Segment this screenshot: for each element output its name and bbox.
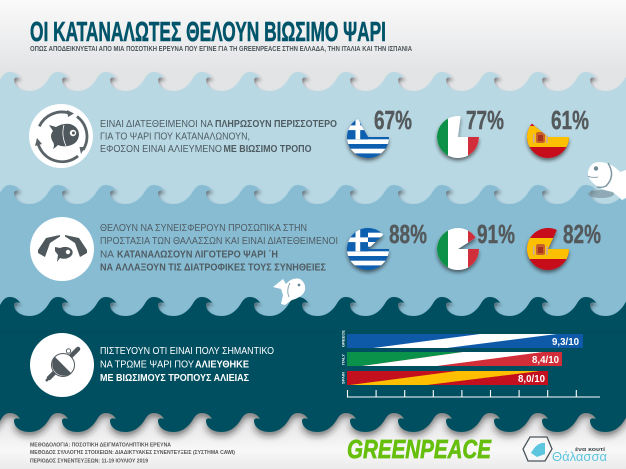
logo: ena kouti thalassa: ένα κουτί [575,447,606,453]
title: ΟΙ ΚΑΤΑΝΑΛΩΤΕΣ ΘΕΛΟΥΝ ΒΙΩΣΙΜΟ ΨΑΡΙ [30,16,386,47]
text: methodology: ΠΕΡΙΟΔΟΣ ΣΥΝΕΝΤΕΥΞΕΩΝ: 11-19 ΙΟΥΛΙΟΥ 2019 [30,458,148,464]
text: methodology [30,442,235,464]
text: willing to pay more: ΜΕ ΒΙΩΣΙΜΟ ΤΡΟΠΟ [224,143,312,155]
text: contribute personally [100,222,338,274]
bar: Greece 9,3/10 [340,330,583,348]
value: Italy 77%: 77% [466,105,504,135]
text: contribute personally: ΘΕΛΟΥΝ ΝΑ ΣΥΝΕΙΣΦΕΡΟΥΝ ΠΡΟΣΩΠΙΚΑ ΣΤΗΝ [100,222,307,234]
text: important to eat sustainably caught fish [100,345,274,384]
text: important to eat sustainably caught fish: ΜΕ ΒΙΩΣΙΜΟΥΣ ΤΡΟΠΟΥΣ ΑΛΙΕΙΑΣ [100,372,249,384]
bar: Italy 8,4/10: ITALY [340,354,346,365]
logo: Greenpeace: GREENPEACE [347,434,492,464]
panel: pay more band [0,72,626,212]
bar: Greece 9,3/10: GREECE [340,330,346,347]
axis with ticks [348,390,600,397]
text: contribute personally: ΝΑ [100,248,114,260]
text: willing to pay more [100,118,337,155]
icon: fishing float [30,333,94,397]
pie: Spain 82% [527,228,569,270]
value: Spain 61%: 61% [551,105,589,135]
icon: white fish right edge [588,162,626,200]
text: willing to pay more: ΕΦΟΣΟΝ ΕΙΝΑΙ ΑΛΙΕΥΜΕΝΟ [100,143,222,155]
panel: sustainable fishing band bottom edge [0,333,626,432]
bar: Spain 8,0/10: SPAIN [340,372,346,384]
text: willing to pay more: ΠΛΗΡΩΣΟΥΝ ΠΕΡΙΣΣΟΤΕΡΟ [215,118,337,130]
text: important to eat sustainably caught fish: ΝΑ ΤΡΩΜΕ ΨΑΡΙ ΠΟΥ [100,358,194,370]
pie: Spain 61% [527,116,569,158]
panel: sustainable fishing band [0,297,626,333]
text: methodology: ΜΕΘΟΔΟΣ ΣΥΛΛΟΓΗΣ ΣΤΟΙΧΕΙΩΝ: ΔΙΑΔΙΚΤΥΑΚΕΣ ΣΥΝΕΝΤΕΥΞΕΙΣ (ΣΥΣΤΗΜΑ CAWI) [30,450,235,456]
pie: Greece 67% [347,116,389,158]
text: important to eat sustainably caught fish: ΑΛΙΕΥΘΗΚΕ [195,358,249,370]
bar chart: scores by country [340,330,600,397]
text: contribute personally: ΝΑ ΑΛΛΑΞΟΥΝ ΤΙΣ ΔΙΑΤΡΟΦΙΚΕΣ ΤΟΥΣ ΣΥΝΗΘΕΙΕΣ [100,262,326,274]
icon: fish with recycling arrows [29,104,93,168]
panel: contribute band [0,185,626,325]
value: Greece 67%: 67% [374,105,412,135]
icon: small white fish on wave [273,279,305,305]
text: willing to pay more: ΓΙΑ ΤΟ ΨΑΡΙ ΠΟΥ ΚΑΤΑΝΑΛΩΝΟΥΝ, [100,130,250,142]
bar: Spain 8,0/10: 8,0/10 [518,373,545,385]
pie: Italy 91% [437,228,479,270]
bar: Italy 8,4/10 [340,352,562,366]
bar: Spain 8,0/10 [340,371,548,385]
icon: hands protecting fish [30,217,94,281]
value: Spain 82%: 82% [563,219,601,249]
value: Italy 91%: 91% [477,219,515,249]
logo: ena kouti thalassa [523,437,607,464]
logo: ena kouti thalassa: Θάλασσα [552,449,607,464]
text: contribute personally: ΚΑΤΑΝΑΛΩΣΟΥΝ ΛΙΓΟΤΕΡΟ ΨΑΡΙ ΄Η [117,248,278,260]
bar: Greece 9,3/10: 9,3/10 [552,336,579,348]
text: willing to pay more: ΕΙΝΑΙ ΔΙΑΤΕΘΕΙΜΕΝΟΙ ΝΑ [100,118,213,130]
subtitle: ΟΠΩΣ ΑΠΟΔΕΙΚΝΥΕΤΑΙ ΑΠΟ ΜΙΑ ΠΟΣΟΤΙΚΗ ΕΡΕΥΝΑ ΠΟΥ ΕΓΙΝΕ ΓΙΑ ΤΗ GREENPEACE ΣΤΗΝ ΕΛΛΑΔΑ, ΤΗΝ ΙΤΑΛΙΑ ΚΑΙ ΤΗΝ ΙΣΠΑΝΙΑ [30,46,412,53]
value: Greece 88%: 88% [389,219,427,249]
pie: Italy 77% [437,116,479,158]
text: important to eat sustainably caught fish: ΠΙΣΤΕΥΟΥΝ ΟΤΙ ΕΙΝΑΙ ΠΟΛΥ ΣΗΜΑΝΤΙΚΟ [100,345,274,357]
text: contribute personally: ΠΡΟΣΤΑΣΙΑ ΤΩΝ ΘΑΛΑΣΣΩΝ ΚΑΙ ΕΙΝΑΙ ΔΙΑΤΕΘΕΙΜΕΝΟΙ [100,235,338,247]
text: methodology: ΜΕΘΟΔΟΛΟΓΙΑ: ΠΟΣΟΤΙΚΗ ΔΕΙΓΜΑΤΟΛΗΠΤΙΚΗ ΕΡΕΥΝΑ [30,442,171,448]
pie: Greece 88% [347,228,389,270]
bar: Italy 8,4/10: 8,4/10 [532,354,559,366]
